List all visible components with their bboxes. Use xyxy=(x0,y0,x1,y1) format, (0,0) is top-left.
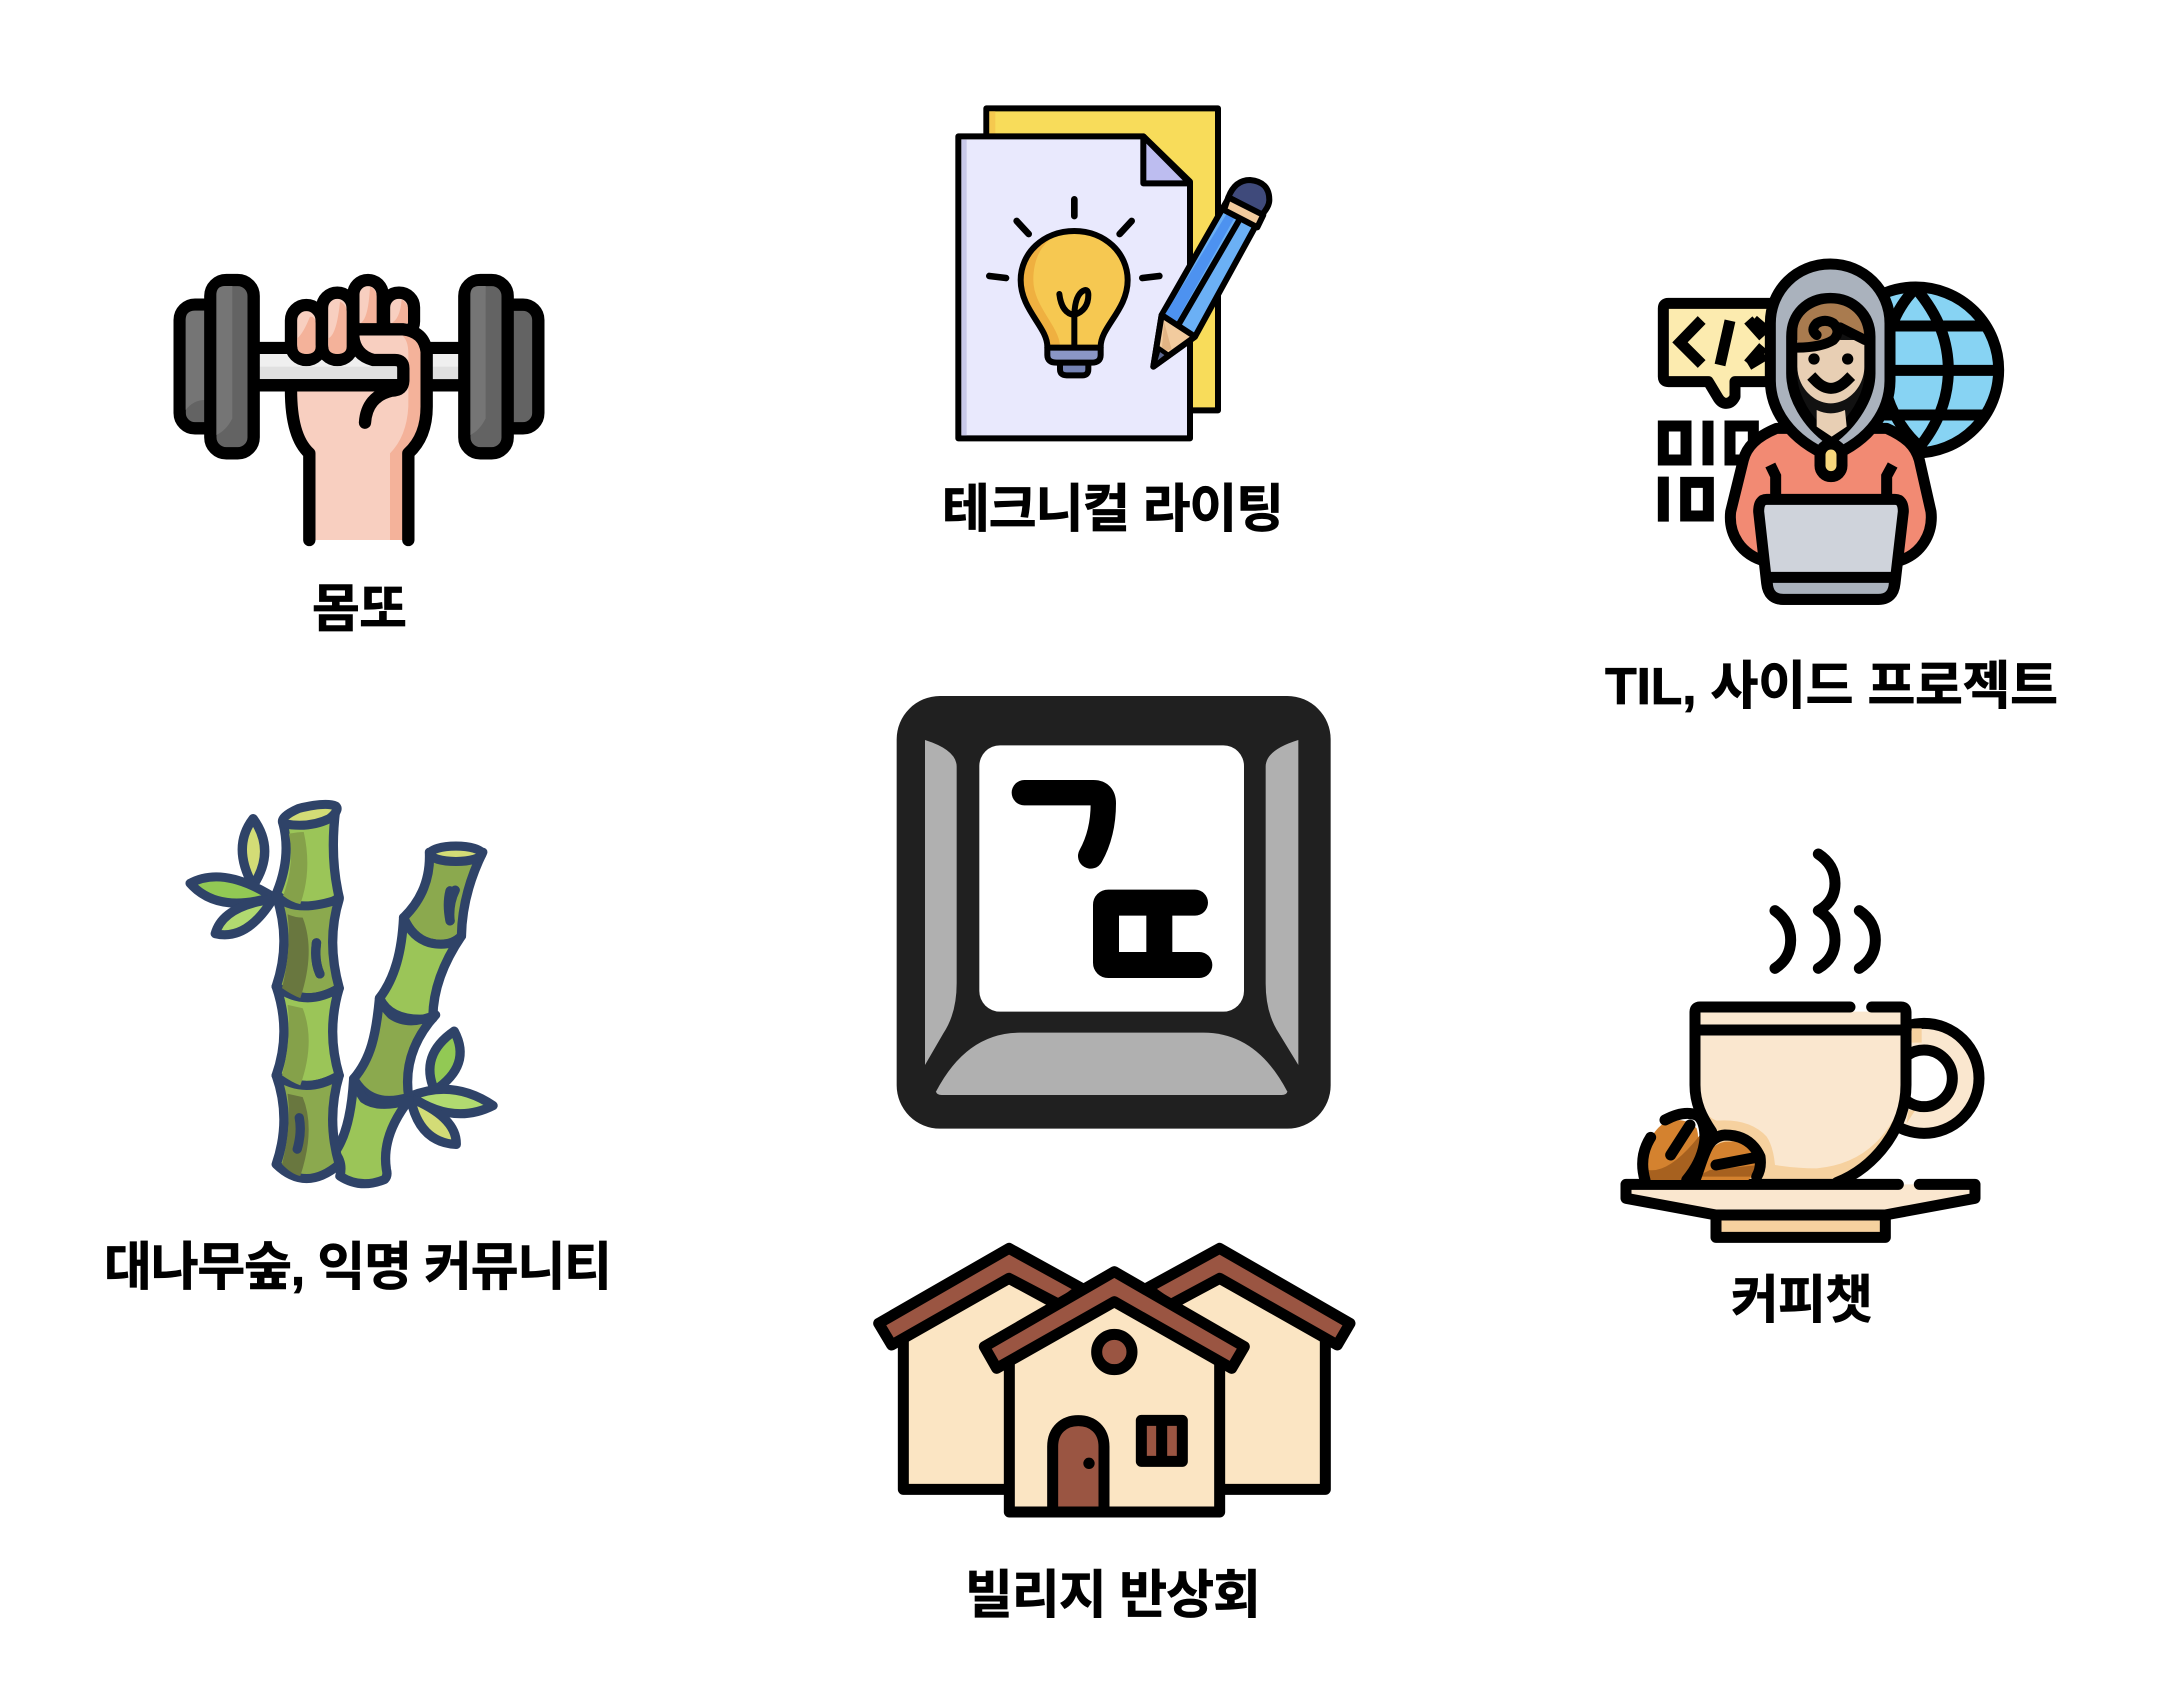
panel: 빌리지 반상회 xyxy=(879,1248,1350,1625)
label: 커피챗: 커피챗 xyxy=(1731,1272,1873,1330)
label: 대나무숲, 익명 커뮤니티: 대나무숲, 익명 커뮤니티 xyxy=(104,1239,612,1297)
panel: 커피챗 xyxy=(1626,854,1979,1330)
icon: center keycap xyxy=(897,696,1331,1129)
panel: 테크니컬 라이팅 xyxy=(942,108,1284,539)
icon: dumbbell and fist xyxy=(180,280,538,540)
icon: village houses xyxy=(879,1248,1350,1512)
icon: developer with hood, globe and laptop xyxy=(1663,264,1999,599)
icon: document, bulb and pencil xyxy=(958,108,1269,438)
label: 몸또: 몸또 xyxy=(312,581,407,639)
panel: 몸또 xyxy=(180,280,538,639)
label: TIL, 사이드 프로젝트: TIL, 사이드 프로젝트 xyxy=(1605,658,2058,716)
panel: 대나무숲, 익명 커뮤니티 xyxy=(104,804,612,1297)
icon: coffee cup with beans xyxy=(1626,854,1979,1237)
panel: TIL, 사이드 프로젝트 xyxy=(1605,264,2058,716)
icon: bamboo xyxy=(190,804,493,1184)
label: 빌리지 반상회: 빌리지 반상회 xyxy=(965,1567,1261,1625)
label: 테크니컬 라이팅: 테크니컬 라이팅 xyxy=(942,481,1284,539)
